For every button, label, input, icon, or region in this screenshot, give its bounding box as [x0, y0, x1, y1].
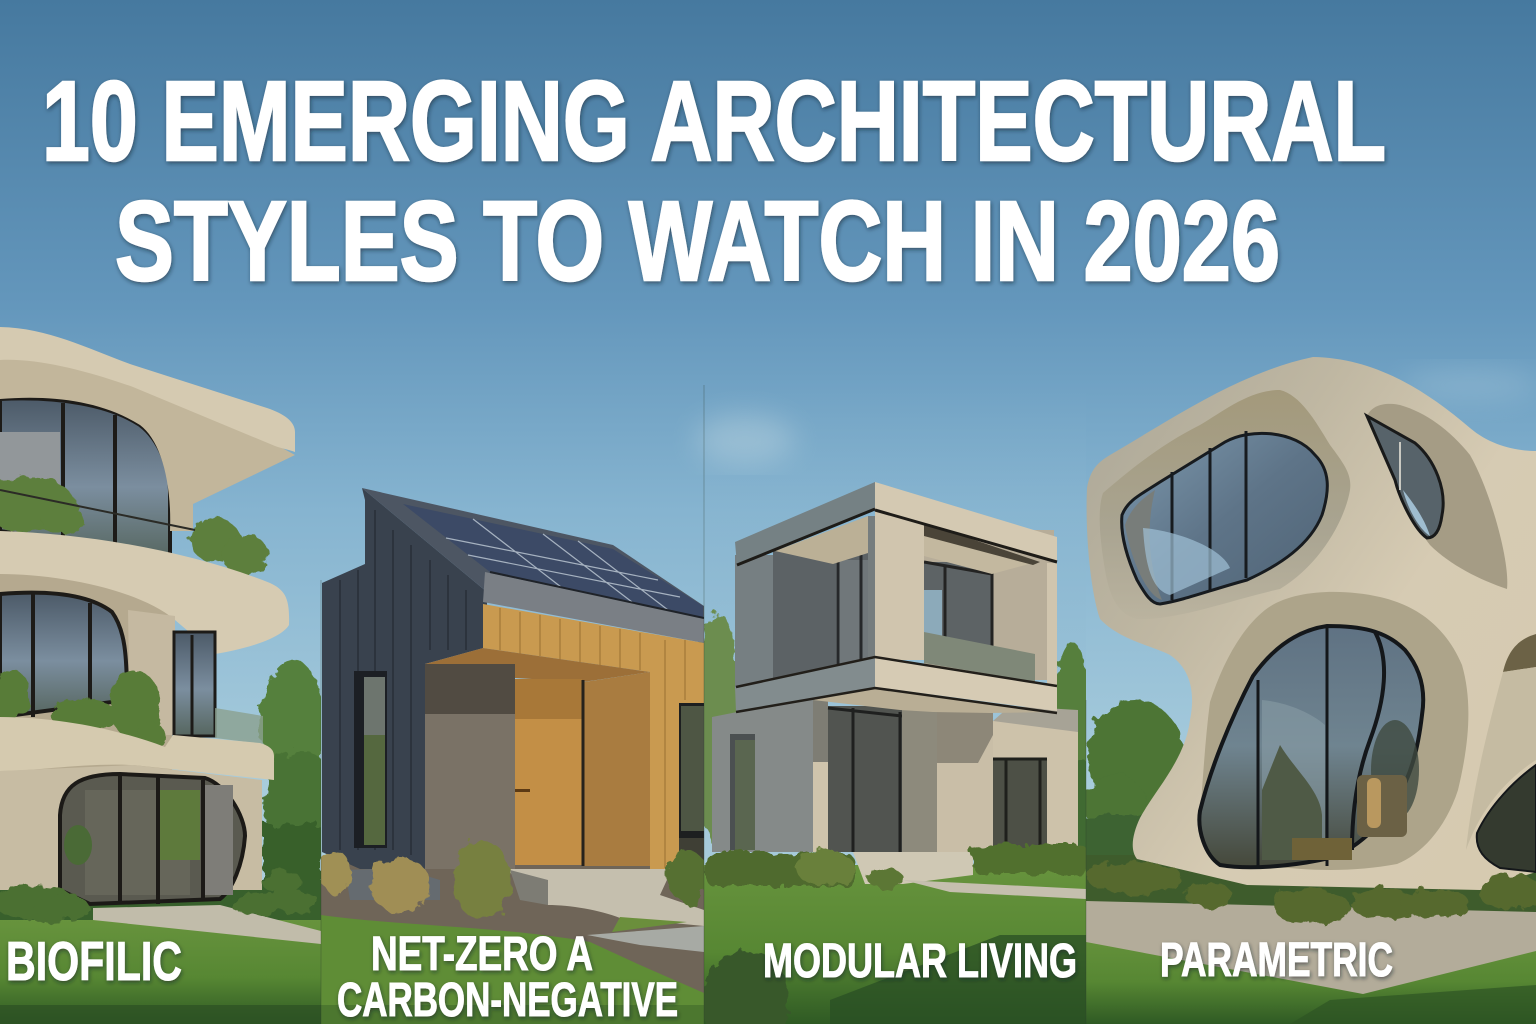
roof plane — [362, 488, 704, 618]
lawn — [321, 905, 704, 1024]
grasses and shrubs — [320, 840, 708, 920]
shrubs — [1087, 862, 1536, 925]
lawn shade right — [830, 935, 1086, 1024]
bushes — [0, 870, 319, 921]
top left cap — [735, 482, 875, 565]
lower strip — [813, 697, 828, 852]
right box — [993, 721, 1078, 851]
door — [515, 679, 582, 865]
panel: parametric — [1082, 357, 1536, 1024]
planter tree — [64, 825, 92, 865]
lower right opening — [1477, 765, 1536, 872]
right arch inner — [1466, 667, 1536, 850]
door frame — [582, 680, 584, 866]
trees — [1082, 700, 1183, 905]
wall shade — [425, 664, 515, 714]
dark ground band — [0, 880, 321, 920]
building back wall — [0, 574, 172, 771]
second floor column — [128, 610, 175, 735]
trees — [694, 612, 1092, 860]
column side — [868, 516, 875, 660]
soffit shadow — [924, 523, 1040, 565]
glass railing — [924, 632, 1035, 682]
fascia battens — [500, 608, 685, 868]
lawn — [0, 920, 321, 1024]
recessed wall — [584, 672, 650, 866]
lower mid wall — [902, 710, 937, 852]
band left — [735, 657, 875, 712]
upper left window — [836, 555, 868, 685]
trees — [256, 660, 321, 880]
recess window — [924, 562, 992, 652]
upper left wall — [735, 555, 773, 690]
top right cap line — [875, 510, 1057, 562]
left window — [354, 671, 387, 848]
lawn shadow — [1290, 985, 1536, 1024]
blob facade — [1087, 357, 1536, 890]
dark ground band — [1086, 855, 1536, 917]
right box window — [993, 758, 1047, 852]
lawn — [704, 865, 1086, 1024]
boulder — [345, 868, 440, 900]
path — [93, 905, 321, 944]
band underside — [813, 688, 1057, 713]
eave — [483, 572, 704, 643]
right arch — [1503, 634, 1536, 672]
band right — [875, 657, 1057, 711]
lower window — [1199, 626, 1423, 867]
path — [903, 880, 1086, 899]
lower recess — [1199, 592, 1468, 870]
right soffit — [924, 532, 1033, 574]
panel: net-zero — [320, 488, 708, 1024]
dark eave line — [490, 572, 704, 618]
title — [42, 58, 1386, 304]
left soffit — [775, 516, 868, 564]
sky variation panel three — [704, 385, 1086, 1024]
balcony rail — [0, 490, 195, 530]
ground gravel — [321, 860, 704, 993]
hedges — [705, 844, 1088, 888]
panel seams — [321, 385, 1086, 1024]
label: parametric: PARAMETRIC — [1160, 934, 1393, 987]
second floor glazing — [0, 593, 127, 720]
label: net-zero line one: NET-ZERO A — [371, 928, 593, 981]
step side — [510, 870, 548, 905]
lawn shadow — [0, 1005, 321, 1024]
third slab — [0, 717, 274, 780]
roof underside and column — [0, 358, 295, 531]
right window — [174, 632, 263, 744]
lower volume left — [712, 697, 813, 852]
top right cap — [875, 482, 1057, 562]
lawn shade — [321, 1005, 704, 1024]
dark wing — [322, 488, 487, 869]
upper recess — [773, 550, 875, 695]
lower right wood — [679, 838, 704, 868]
upper right window — [1367, 416, 1443, 538]
wood fascia — [483, 604, 704, 870]
right window — [679, 703, 704, 838]
label: biofilic: BIOFILIC — [6, 930, 182, 992]
upper glazing — [0, 398, 170, 560]
side tree — [698, 642, 704, 643]
upper right recess — [1367, 404, 1507, 589]
upper right recess — [924, 530, 1054, 680]
hanging plants — [0, 669, 164, 749]
style labels — [6, 928, 1393, 1024]
green strip — [612, 917, 687, 932]
lower window left — [730, 734, 755, 850]
label: modular living: MODULAR LIVING — [763, 935, 1077, 988]
strip shadow — [813, 697, 828, 762]
second slab — [0, 531, 289, 654]
foreground shrub — [701, 950, 789, 1024]
grey wood wall — [425, 714, 515, 869]
panel: biofilic — [0, 327, 336, 1024]
band lines — [736, 657, 1057, 713]
ground floor wall — [0, 765, 262, 890]
upper recess — [1100, 390, 1350, 619]
upper window — [1122, 431, 1327, 604]
cream wall shadow — [937, 708, 993, 763]
solar array — [403, 504, 703, 618]
steps — [507, 869, 704, 926]
clouds — [695, 369, 1536, 465]
lawn — [1086, 930, 1536, 1024]
cladding lines — [340, 510, 466, 855]
steps — [853, 852, 973, 884]
top left cap line — [737, 509, 875, 565]
right box cap — [993, 706, 1078, 732]
roof slab — [0, 327, 295, 452]
balcony plants — [0, 477, 267, 577]
gravel — [1086, 901, 1536, 994]
entry glass — [828, 706, 902, 852]
porch ceiling — [425, 648, 650, 682]
concrete path — [587, 926, 704, 952]
center column — [875, 510, 924, 660]
ground floor glazing — [60, 774, 245, 904]
lower cream wall — [937, 708, 993, 852]
panel: modular living — [694, 482, 1092, 1024]
right strip — [1047, 563, 1057, 689]
